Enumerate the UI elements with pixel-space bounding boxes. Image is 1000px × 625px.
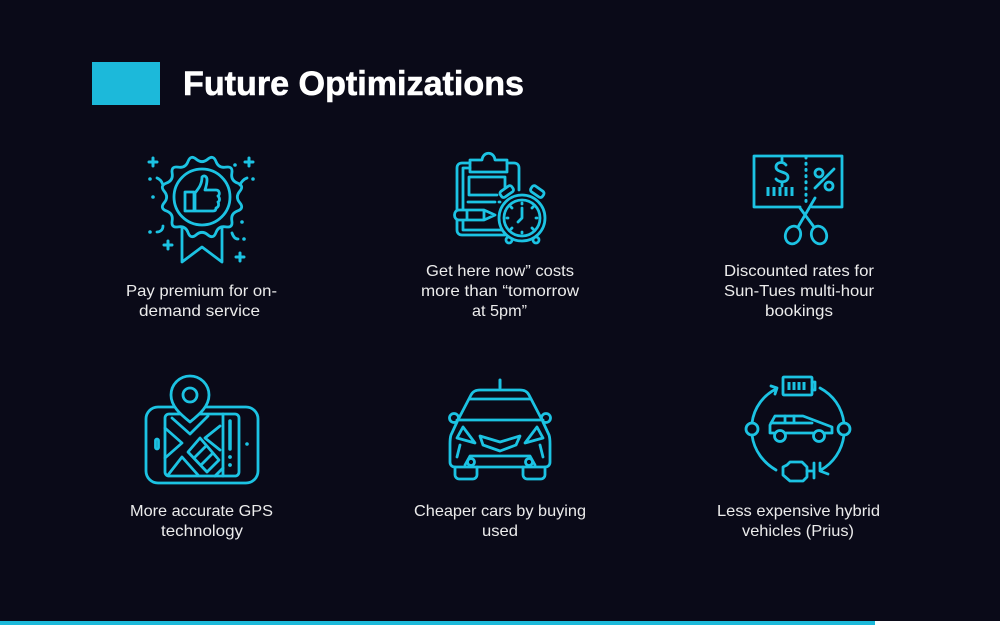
caption bbox=[724, 263, 875, 320]
caption bbox=[126, 283, 277, 320]
caption bbox=[414, 503, 586, 540]
caption: bookings bbox=[765, 303, 833, 320]
heading block bbox=[92, 62, 524, 105]
caption: More accurate GPS bbox=[130, 503, 273, 520]
panel: discounted rates bbox=[724, 156, 875, 320]
caption: Sun-Tues multi-hour bbox=[724, 283, 875, 300]
caption bbox=[717, 503, 880, 540]
panel: premium on-demand service bbox=[126, 157, 277, 320]
icon: clipboard with alarm clock bbox=[454, 153, 545, 243]
title: Future Optimizations bbox=[183, 65, 524, 103]
progress bar bbox=[0, 621, 1000, 625]
caption bbox=[130, 503, 273, 540]
caption: demand service bbox=[139, 303, 260, 320]
icon: award badge with thumbs up bbox=[148, 157, 255, 262]
caption: used bbox=[482, 523, 518, 540]
icon: coupon and scissors bbox=[754, 156, 842, 246]
caption: Discounted rates for bbox=[724, 263, 875, 280]
icon: phone with map pin bbox=[146, 376, 258, 483]
caption: Get here now” costs bbox=[426, 263, 574, 280]
caption: Pay premium for on- bbox=[126, 283, 277, 300]
caption: at 5pm” bbox=[472, 303, 527, 320]
panel: time-based pricing bbox=[421, 153, 579, 320]
caption bbox=[421, 263, 579, 320]
panel: hybrid vehicles bbox=[717, 377, 880, 540]
caption: Cheaper cars by buying bbox=[414, 503, 586, 520]
panel: cheaper used cars bbox=[414, 380, 586, 540]
title accent rectangle bbox=[92, 62, 160, 105]
icon: front view of car bbox=[450, 380, 550, 479]
caption: more than “tomorrow bbox=[421, 283, 579, 300]
panel: GPS technology bbox=[130, 376, 273, 540]
caption: Less expensive hybrid bbox=[717, 503, 880, 520]
caption: vehicles (Prius) bbox=[742, 523, 854, 540]
icon: hybrid cycle with car, battery and engine bbox=[746, 377, 850, 481]
caption: technology bbox=[161, 523, 243, 540]
